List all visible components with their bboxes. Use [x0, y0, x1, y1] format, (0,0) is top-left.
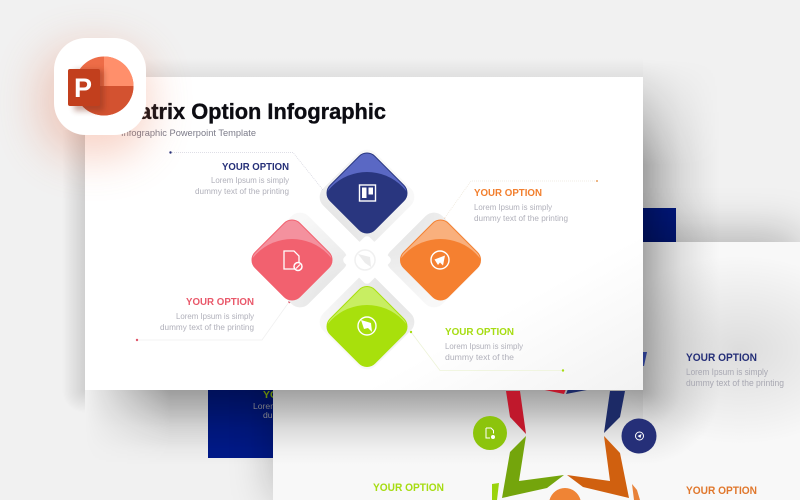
option label green: YOUR OPTION [373, 482, 444, 494]
star shape: green arm [502, 436, 564, 498]
option text: red: YOUR OPTION [186, 296, 254, 308]
connector: orange [443, 180, 598, 220]
blue backing panel [208, 208, 676, 458]
option label navy: YOUR OPTION [686, 352, 757, 364]
star shape: red arm [506, 391, 526, 434]
blue backing panel: Lorem Ipsum is simply [253, 401, 339, 411]
icon: board [360, 185, 376, 201]
powerpoint icon glow [58, 50, 142, 134]
back slide [273, 242, 800, 500]
option text: navy [195, 161, 290, 196]
diamond: green [326, 286, 408, 367]
option label orange: YOUR OPTION [686, 485, 757, 497]
option text: green: dummy text of the [445, 352, 514, 362]
icon: document blocked [284, 251, 302, 270]
green circle with icon [473, 416, 507, 450]
option text: red: Lorem Ipsum is simply [176, 311, 255, 321]
option text: navy: dummy text of the printing [195, 186, 289, 196]
icon: paper plane [431, 251, 449, 269]
blue backing panel: dummy text [263, 410, 308, 420]
matrix backing tiles [248, 145, 486, 374]
connector: green [410, 331, 564, 372]
option label navy [686, 352, 784, 388]
option text: navy: YOUR OPTION [222, 161, 289, 173]
icon: cursor [358, 317, 376, 335]
logo P tile: P [74, 73, 92, 103]
option text: red [160, 296, 255, 332]
title: Matrix Option Infographic [121, 99, 386, 124]
star shape: navy arm [604, 391, 625, 433]
logo circle [74, 56, 134, 116]
blue backing panel: YOUR OPTION [263, 389, 337, 401]
diamond: red [252, 220, 332, 300]
shadow of back slide [273, 232, 800, 500]
option text: navy: Lorem Ipsum is simply [211, 175, 290, 185]
option text: red: dummy text of the printing [160, 322, 254, 332]
option text: orange [474, 187, 568, 223]
option label navy: dummy text of the printing [686, 378, 784, 388]
navy circle with icon [622, 418, 656, 454]
option text: orange: Lorem Ipsum is simply [474, 202, 553, 212]
option text: green [445, 326, 524, 362]
subtitle: Infographic Powerpoint Template [121, 128, 256, 139]
orange circle [550, 488, 580, 500]
star shape: orange arm [567, 436, 629, 498]
front layer: main slide and its shadow [68, 68, 704, 449]
center diamond [342, 235, 392, 285]
diamond: navy [326, 152, 408, 234]
option text: green: YOUR OPTION [445, 326, 514, 338]
option text: orange: YOUR OPTION [474, 187, 542, 199]
option text: green: Lorem Ipsum is simply [445, 341, 524, 351]
star shape: top edge pieces [492, 352, 647, 500]
option text: orange: dummy text of the printing [474, 213, 568, 223]
diamond: orange [400, 220, 481, 300]
connector: navy [169, 151, 324, 192]
option label navy: Lorem Ipsum is simply [686, 367, 768, 377]
main slide [85, 77, 643, 405]
shadow of main slide [62, 58, 720, 465]
connector: red [136, 301, 291, 341]
